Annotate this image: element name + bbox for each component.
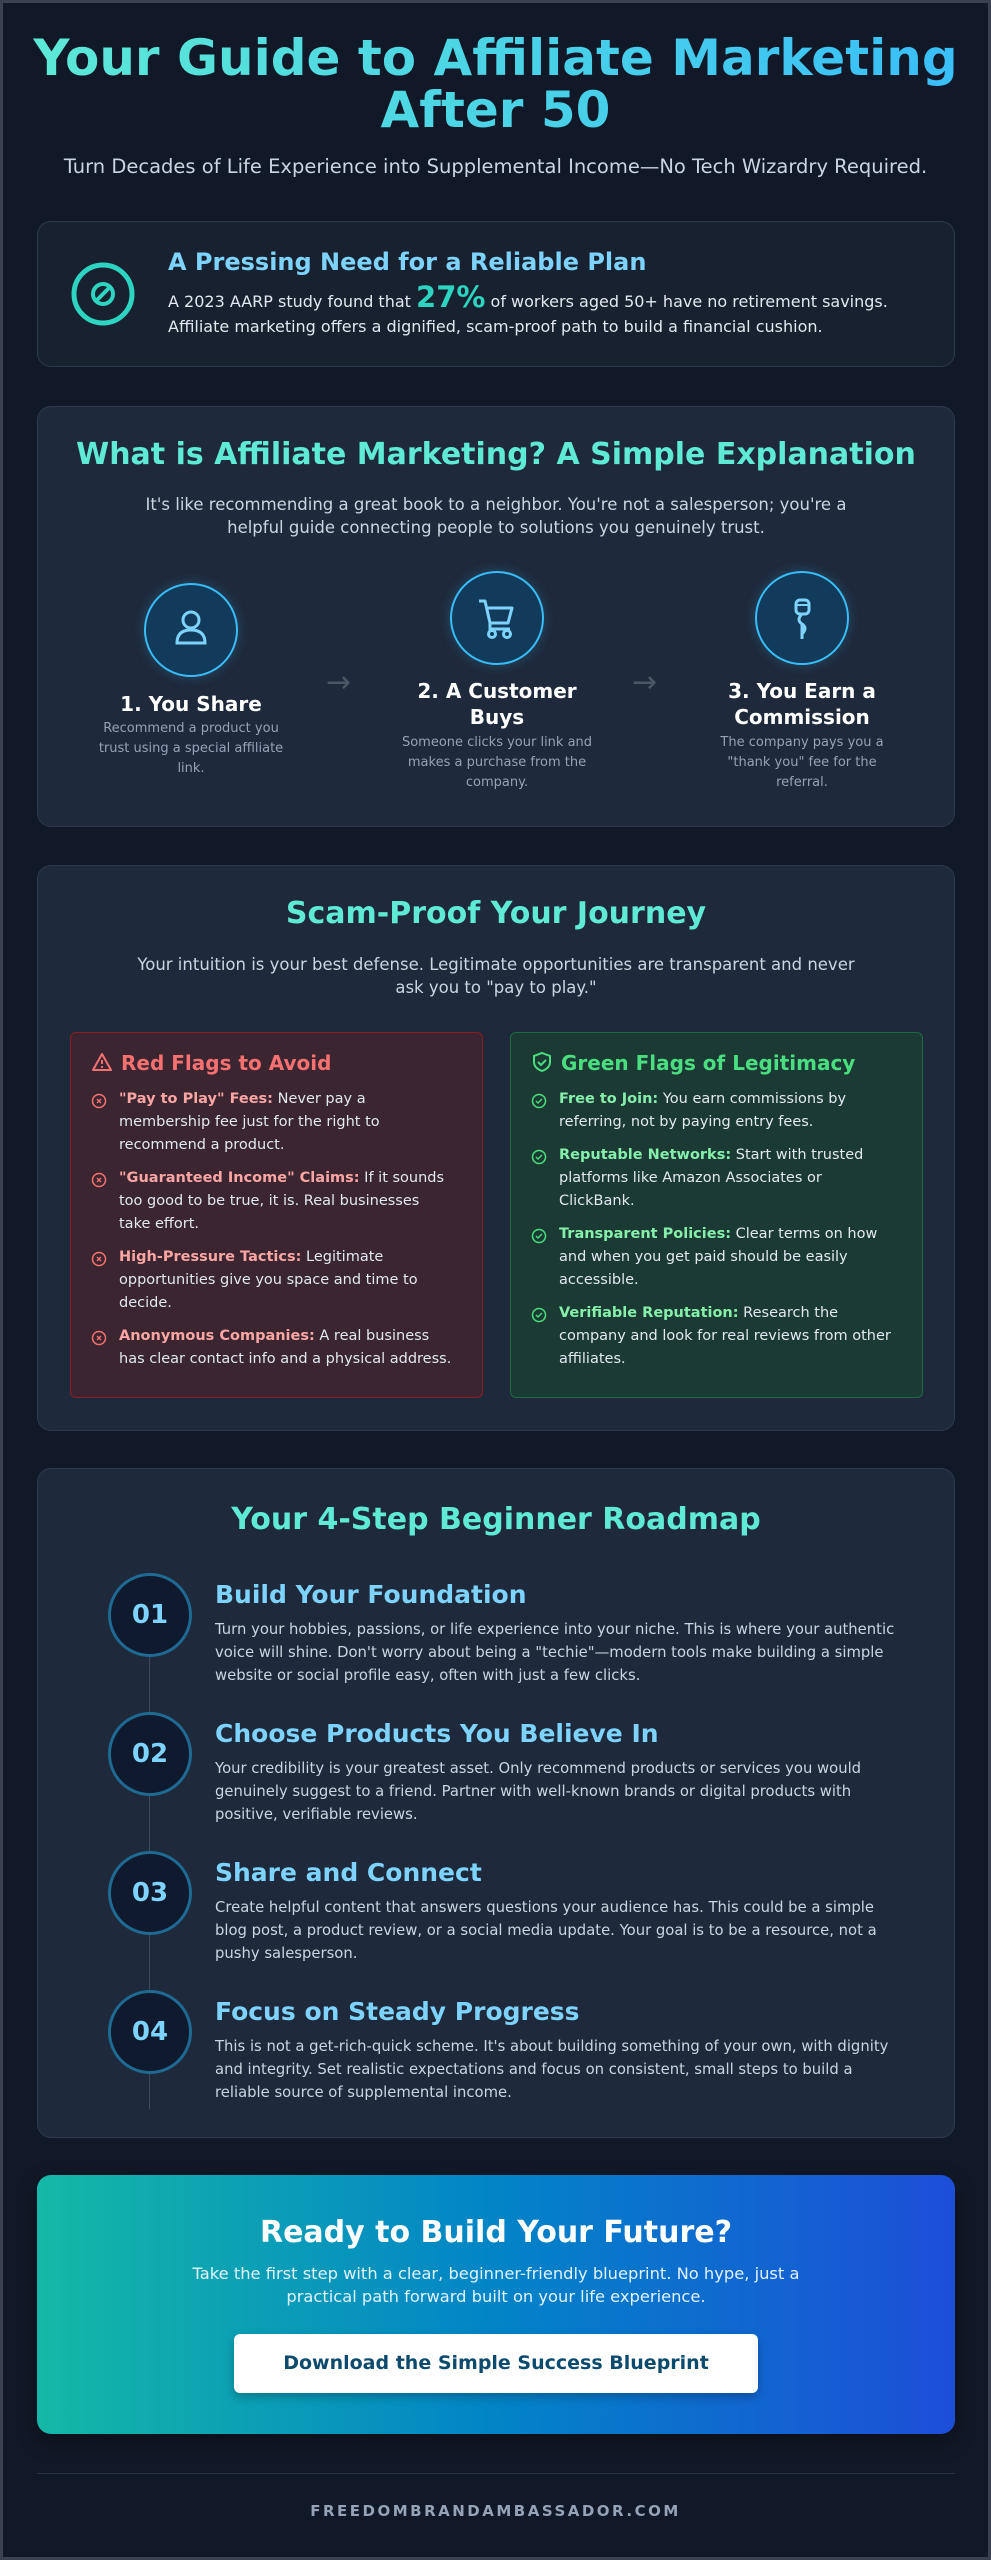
green flags box: referring, not by paying entry fees. — [559, 1114, 813, 1130]
red flags box: too good to be true, it is. Real businesses — [119, 1193, 419, 1209]
step 1: Recommend a product you — [103, 721, 279, 736]
step 04: and integrity. Set realistic expectations and focus on consistent, small steps to build a — [215, 2061, 853, 2078]
step 01: Build Your Foundation — [215, 1580, 526, 1609]
step 2: Buys — [470, 705, 524, 729]
green flags box: Verifiable Reputation: Research the — [559, 1305, 838, 1321]
stat text: A 2023 AARP study found that 27% of workers aged 50+ have no retirement savings. — [168, 280, 888, 314]
icon: person — [144, 583, 238, 677]
green flags box: ClickBank. — [559, 1193, 635, 1209]
red flags box: recommend a product. — [119, 1137, 284, 1153]
step 02: Choose Products You Believe In — [215, 1719, 659, 1748]
CTA button: Download the Simple Success Blueprint — [283, 2352, 709, 2374]
step 2: makes a purchase from the — [408, 755, 586, 770]
step 3: Commission — [734, 705, 870, 729]
red flags box: decide. — [119, 1295, 172, 1311]
green flags box: company and look for real reviews from other — [559, 1328, 891, 1344]
step 01: 01 — [132, 1600, 168, 1630]
step 3: "thank you" fee for the — [727, 755, 877, 770]
green flags box: and when you get paid should be easily — [559, 1249, 848, 1265]
step 3: The company pays you a — [720, 735, 884, 750]
red flags box: membership fee just for the right to — [119, 1114, 380, 1130]
step 2: 2. A Customer — [417, 679, 577, 703]
step 03: Create helpful content that answers questions your audience has. This could be a simple — [215, 1899, 874, 1916]
CTA panel — [37, 2175, 955, 2434]
green flags box: platforms like Amazon Associates or — [559, 1170, 822, 1186]
step 04: Focus on Steady Progress — [215, 1997, 580, 2026]
red flags box: take effort. — [119, 1216, 199, 1232]
stat text: Affiliate marketing offers a dignified, scam-proof path to build a financial cushion. — [168, 317, 823, 336]
green flags box — [510, 1032, 923, 1398]
step 02: positive, verifiable reviews. — [215, 1806, 418, 1823]
intro text: helpful guide connecting people to solutions you genuinely trust. — [227, 518, 765, 537]
step 02 — [108, 1712, 861, 1823]
CTA text: Take the first step with a clear, beginner-friendly blueprint. No hype, just a — [193, 2264, 799, 2283]
panel: scam-proof — [37, 865, 955, 1431]
green flags box: Transparent Policies: Clear terms on how — [559, 1226, 877, 1242]
green heading: Green Flags of Legitimacy — [561, 1051, 855, 1075]
icon: money — [755, 571, 849, 665]
heading: Your 4-Step Beginner Roadmap — [231, 1502, 761, 1537]
step 1: link. — [177, 761, 205, 776]
step 01: website or social profile easy, often with just a few clicks. — [215, 1667, 640, 1684]
green flags box: affiliates. — [559, 1351, 626, 1367]
red flags box — [70, 1032, 483, 1398]
step 01: Turn your hobbies, passions, or life experience into your niche. This is where your authentic — [215, 1621, 894, 1638]
red flags box: has clear contact info and a physical address. — [119, 1351, 451, 1367]
footer: FREEDOMBRANDAMBASSADOR.COM — [310, 2502, 681, 2520]
step 03 — [108, 1851, 877, 1962]
stat text — [168, 280, 888, 336]
step 04: 04 — [132, 2017, 168, 2047]
icon: cart — [450, 571, 544, 665]
intro text — [137, 955, 855, 997]
CTA text — [192, 2264, 799, 2306]
step 03: Share and Connect — [215, 1858, 482, 1887]
title — [0, 32, 991, 136]
step 1 — [99, 578, 283, 776]
arrow 2: → — [632, 665, 657, 700]
green flags box: accessible. — [559, 1272, 639, 1288]
step 02: genuinely suggest to a friend. Partner with well-known brands or digital products with — [215, 1783, 851, 1800]
red flags box: opportunities give you space and time to — [119, 1272, 418, 1288]
step 2: company. — [466, 775, 528, 790]
step 2 — [402, 566, 592, 790]
heading: Scam-Proof Your Journey — [286, 896, 706, 931]
step 04: reliable source of supplemental income. — [215, 2084, 512, 2101]
panel: pressing need — [37, 221, 955, 367]
step 04: This is not a get-rich-quick scheme. It's about building something of your own, with dignity — [215, 2038, 888, 2055]
CTA button — [234, 2334, 758, 2393]
step 03: pushy salesperson. — [215, 1945, 357, 1962]
step 3: 3. You Earn a — [728, 679, 876, 703]
step 04 — [108, 1990, 888, 2101]
arrow 1: → — [326, 665, 351, 700]
step 02: Your credibility is your greatest asset. Only recommend products or services you would — [215, 1760, 861, 1777]
intro text: Your intuition is your best defense. Legitimate opportunities are transparent and never — [137, 955, 855, 974]
heading: What is Affiliate Marketing? A Simple Explanation — [76, 437, 916, 472]
red flags box: "Pay to Play" Fees: Never pay a — [119, 1091, 366, 1107]
green flags box: Free to Join: You earn commissions by — [559, 1091, 846, 1107]
CTA text: practical path forward built on your life experience. — [286, 2287, 706, 2306]
step 3: referral. — [776, 775, 828, 790]
step 2: Someone clicks your link and — [402, 735, 592, 750]
step 1: trust using a special affiliate — [99, 741, 283, 756]
red flags box: High-Pressure Tactics: Legitimate — [119, 1249, 383, 1265]
icon: savings circle — [72, 262, 134, 326]
title: Your Guide to Affiliate Marketing — [33, 29, 958, 87]
heading: A Pressing Need for a Reliable Plan — [168, 248, 646, 276]
intro text: ask you to "pay to play." — [395, 978, 597, 997]
panel: roadmap — [37, 1468, 955, 2138]
title: After 50 — [381, 81, 610, 139]
step 01 — [108, 1573, 894, 1684]
red flags box: Anonymous Companies: A real business — [119, 1328, 429, 1344]
subtitle: Turn Decades of Life Experience into Supplemental Income—No Tech Wizardry Required. — [64, 155, 927, 178]
step 01: voice will shine. Don't worry about being a "techie"—modern tools make building a simple — [215, 1644, 884, 1661]
step 03: 03 — [132, 1878, 168, 1908]
step 3 — [720, 566, 884, 790]
red heading: Red Flags to Avoid — [121, 1051, 331, 1075]
green flags box: Reputable Networks: Start with trusted — [559, 1147, 863, 1163]
intro text — [146, 495, 846, 537]
CTA heading: Ready to Build Your Future? — [260, 2215, 732, 2250]
step 02: 02 — [132, 1739, 168, 1769]
step 03: blog post, a product review, or a social media update. Your goal is to be a resource, not a — [215, 1922, 877, 1939]
step 1: 1. You Share — [120, 692, 262, 716]
intro text: It's like recommending a great book to a neighbor. You're not a salesperson; you're a — [146, 495, 846, 514]
red flags box: "Guaranteed Income" Claims: If it sounds — [119, 1170, 444, 1186]
panel: what is affiliate marketing — [37, 406, 955, 827]
